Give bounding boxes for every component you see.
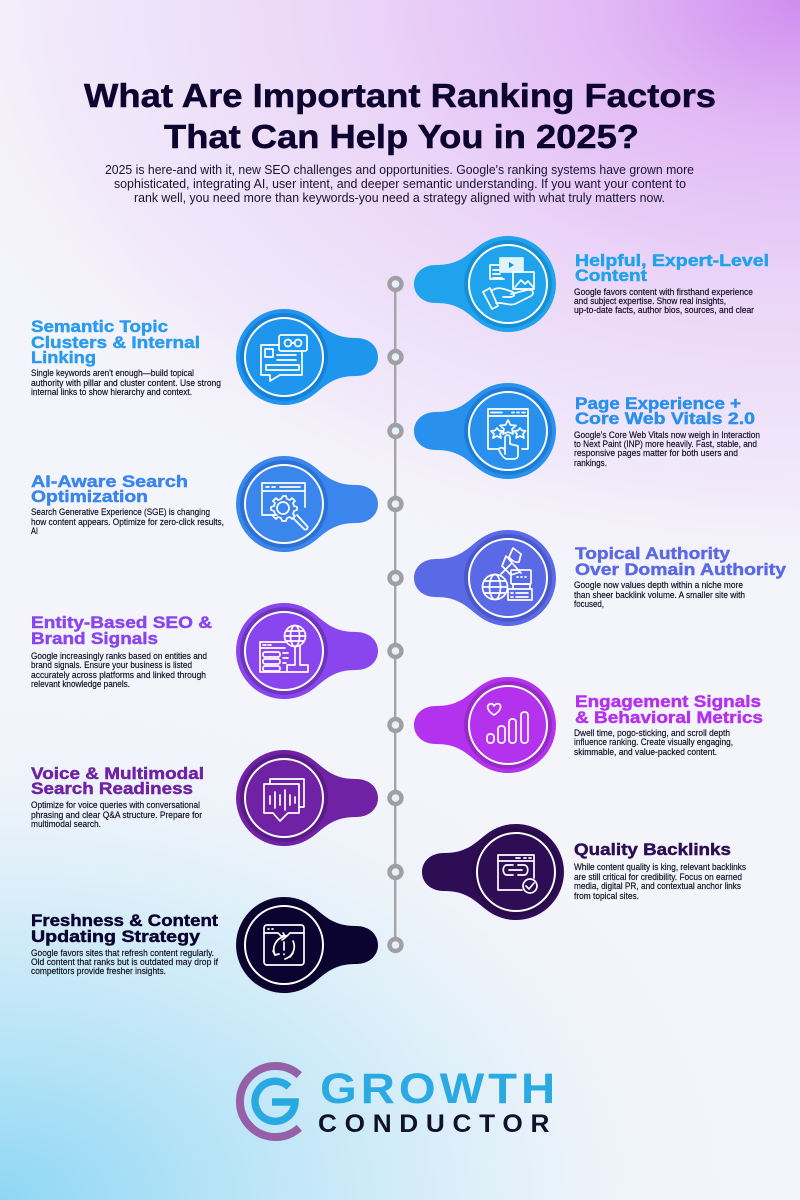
badge: topical authority [414,530,556,626]
heading: freshness: Updating Strategy [31,928,201,946]
intro text: 2025 is here-and with it, new SEO challenges and opportunities. Google's ranking systems have grown more [105,163,694,177]
text: page experience [574,430,760,468]
heading: entity-based SEO: Entity-Based SEO & [31,614,212,632]
heading: topical authority [575,545,787,579]
badge: engagement signals [414,677,556,773]
heading: AI-aware search [31,473,188,506]
panel: entity-based SEO [31,603,378,699]
heading: quality backlinks: Quality Backlinks [574,841,731,859]
heading: voice search [31,765,204,798]
text: freshness: competitors provide fresher insights. [31,966,166,976]
heading: page experience: Core Web Vitals 2.0 [575,410,755,428]
title [84,77,716,155]
badge: AI-aware search [236,456,378,552]
title: What Are Important Ranking Factors [84,77,716,114]
heading: freshness: Freshness & Content [31,912,219,930]
heading: helpful content: Content [575,267,648,285]
panel: topical authority [414,530,787,626]
title: That Can Help You in 2025? [164,118,639,155]
text: quality backlinks: from topical sites. [574,891,639,901]
badge: entity-based SEO [236,603,378,699]
panel: AI-aware search [31,456,378,552]
text: helpful content: up-to-date facts, author bios, sources, and clear [574,305,754,315]
text: freshness: Google favors sites that refresh content regularly. [31,948,214,958]
text: entity-based SEO: brand signals. Ensure your business is listed [31,660,192,670]
icon: CG monogram [240,1066,299,1137]
text: freshness [31,948,218,976]
heading: helpful content [575,252,769,285]
text: quality backlinks: are still critical for credibility. Focus on earned [574,872,742,882]
text: entity-based SEO: accurately across platforms and linked through [31,670,206,680]
text: freshness: Old content that ranks but is outdated may drop if [31,957,218,967]
text: AI-aware search: how content appears. Optimize for zero-click results, [31,517,224,527]
badge: freshness [236,897,378,993]
heading: engagement signals: Engagement Signals [575,693,761,711]
text: quality backlinks: While content quality is king, relevant backlinks [574,862,746,872]
timeline line and dots [390,278,402,951]
panel: voice search [31,750,378,846]
text: page experience: responsive pages matter for both users and [574,448,738,458]
text: voice search: phrasing and clear Q&A structure. Prepare for [31,810,202,820]
text: engagement signals: influence ranking. Create visually engaging, [574,737,733,747]
text: topical authority: Google now values depth within a niche more [574,580,743,590]
text: topical authority: focused, [574,599,604,609]
text: AI-aware search: Search Generative Experience (SGE) is changing [31,507,210,517]
text: quality backlinks [574,862,746,901]
text: helpful content [574,287,754,315]
wordmark: GROWTH [320,1064,559,1113]
heading: AI-aware search: AI-Aware Search [31,473,188,491]
heading: voice search: Voice & Multimodal [31,765,204,783]
heading: engagement signals [575,693,763,727]
heading: semantic topic clusters: Semantic Topic [31,318,168,336]
text: semantic topic clusters: internal links to show hierarchy and context. [31,387,192,397]
heading: page experience [575,395,755,428]
badge: helpful content [414,236,556,332]
text: AI-aware search: AI [31,526,38,536]
heading: topical authority: Over Domain Authority [575,561,787,579]
text: voice search: multimodal search. [31,819,101,829]
text: engagement signals [574,728,733,757]
intro text [105,163,694,205]
heading: entity-based SEO: Brand Signals [31,630,158,648]
text: page experience: to Next Paint (INP) more heavily. Fast, stable, and [574,439,757,449]
text: semantic topic clusters [31,368,221,397]
panel: page experience [414,383,760,479]
wordmark subline: CONDUCTOR [318,1111,557,1138]
panel: helpful content [414,236,769,332]
badge: quality backlinks [422,824,564,920]
heading: engagement signals: & Behavioral Metrics [575,709,763,727]
text: entity-based SEO [31,651,207,689]
badge: page experience [414,383,556,479]
heading: freshness [31,912,219,946]
text: voice search [31,800,202,829]
text: topical authority [574,580,745,609]
heading: semantic topic clusters: Linking [31,349,96,367]
heading: entity-based SEO [31,614,212,648]
text: quality backlinks: media, digital PR, and contextual anchor links [574,881,741,891]
text: entity-based SEO: relevant knowledge panels. [31,679,130,689]
heading: semantic topic clusters: Clusters & Internal [31,334,200,352]
logo: Growth Conductor [240,1064,559,1138]
text: topical authority: than sheer backlink volume. A smaller site with [574,590,745,600]
intro text: rank well, you need more than keywords-you need a strategy aligned with what truly matters now. [134,191,665,205]
heading: AI-aware search: Optimization [31,488,148,506]
heading: helpful content: Helpful, Expert-Level [575,252,769,270]
text: semantic topic clusters: Single keywords aren't enough—build topical [31,368,194,378]
text: helpful content: and subject expertise. Show real insights, [574,296,726,306]
text: helpful content: Google favors content with firsthand experience [574,287,753,297]
heading: page experience: Page Experience + [575,395,741,413]
text: page experience: rankings. [574,458,607,468]
text: voice search: Optimize for voice queries with conversational [31,800,200,810]
intro text: sophisticated, integrating AI, user intent, and deeper semantic understanding. If you want your content to [114,177,686,191]
text: page experience: Google's Core Web Vitals now weigh in Interaction [574,430,760,440]
text: AI-aware search [31,507,224,536]
badge: voice search [236,750,378,846]
heading: topical authority: Topical Authority [575,545,731,563]
heading: voice search: Search Readiness [31,780,193,798]
badge: semantic topic clusters [236,309,378,405]
text: semantic topic clusters: authority with pillar and cluster content. Use strong [31,378,221,388]
panel: engagement signals [414,677,763,773]
panel: semantic topic clusters [31,309,378,405]
panel: quality backlinks [422,824,746,920]
text: engagement signals: skimmable, and value-packed content. [574,747,717,757]
panel: freshness [31,897,378,993]
text: entity-based SEO: Google increasingly ranks based on entities and [31,651,207,661]
text: engagement signals: Dwell time, pogo-sticking, and scroll depth [574,728,730,738]
heading: semantic topic clusters [31,318,200,367]
